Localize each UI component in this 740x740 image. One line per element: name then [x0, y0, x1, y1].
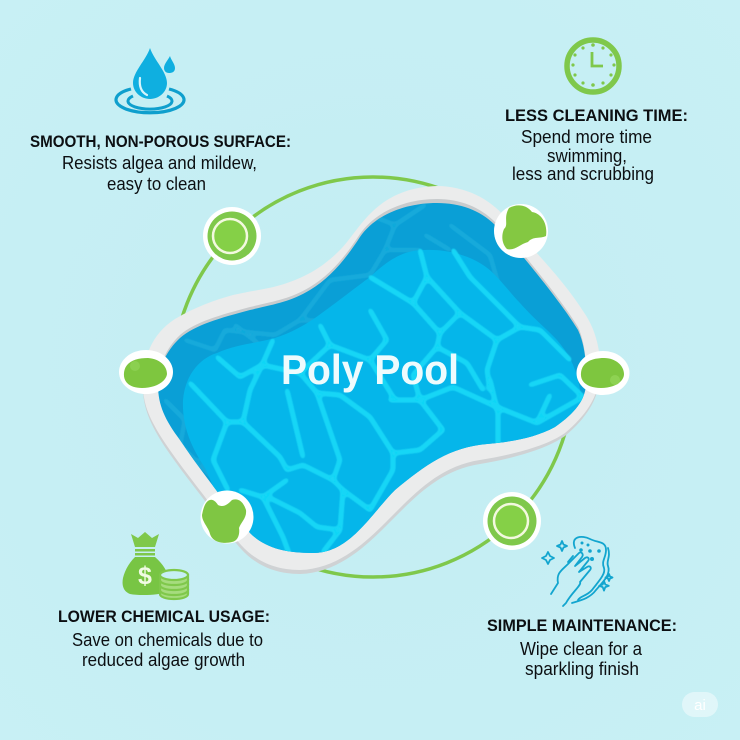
heading: LOWER CHEMICAL USAGE:: [58, 607, 270, 626]
panel: lower chemical usage: [58, 532, 270, 670]
lighter water area: [183, 250, 583, 553]
pool: [143, 186, 599, 574]
panel: less cleaning time: [505, 40, 688, 184]
icon: clock: [567, 40, 619, 92]
icon: water drop with ripples: [116, 48, 184, 113]
bright ripple lines: [190, 250, 583, 556]
body line 1: Save on chemicals due to: [72, 630, 263, 650]
node: bottom left: [200, 490, 254, 544]
node: top right: [494, 204, 548, 258]
badge: ai watermark: [682, 692, 718, 717]
pool coping: [143, 186, 600, 574]
pool name: Poly Pool: [281, 346, 459, 393]
node: bottom right: [483, 492, 541, 550]
icon: hand wiping with sponge: [542, 537, 612, 606]
body line 2: easy to clean: [107, 174, 206, 194]
body line 1: Spend more time: [521, 127, 652, 147]
green connecting ring: [173, 177, 573, 577]
body line 2: reduced algae growth: [82, 650, 245, 670]
node: right: [576, 351, 630, 395]
heading: LESS CLEANING TIME:: [505, 106, 688, 125]
panel: simple maintenance: [487, 537, 677, 679]
heading: SMOOTH, NON-POROUS SURFACE:: [30, 132, 291, 151]
badge: ai watermark: ai: [694, 697, 706, 714]
body line 2: sparkling finish: [525, 659, 639, 679]
heading: SIMPLE MAINTENANCE:: [487, 616, 677, 635]
body line 2: swimming,: [547, 146, 627, 166]
pool water: [158, 203, 586, 553]
node: left: [119, 350, 173, 394]
body line 3: less and scrubbing: [512, 164, 654, 184]
body line 1: Resists algea and mildew,: [62, 153, 257, 173]
panel: smooth surface: [30, 48, 291, 194]
icon: money bag and coins: [123, 532, 188, 599]
body line 1: Wipe clean for a: [520, 639, 643, 659]
dark zone ripple lines: [164, 204, 499, 477]
node: top left: [203, 207, 261, 265]
icon: money bag and coins: $: [138, 562, 152, 590]
